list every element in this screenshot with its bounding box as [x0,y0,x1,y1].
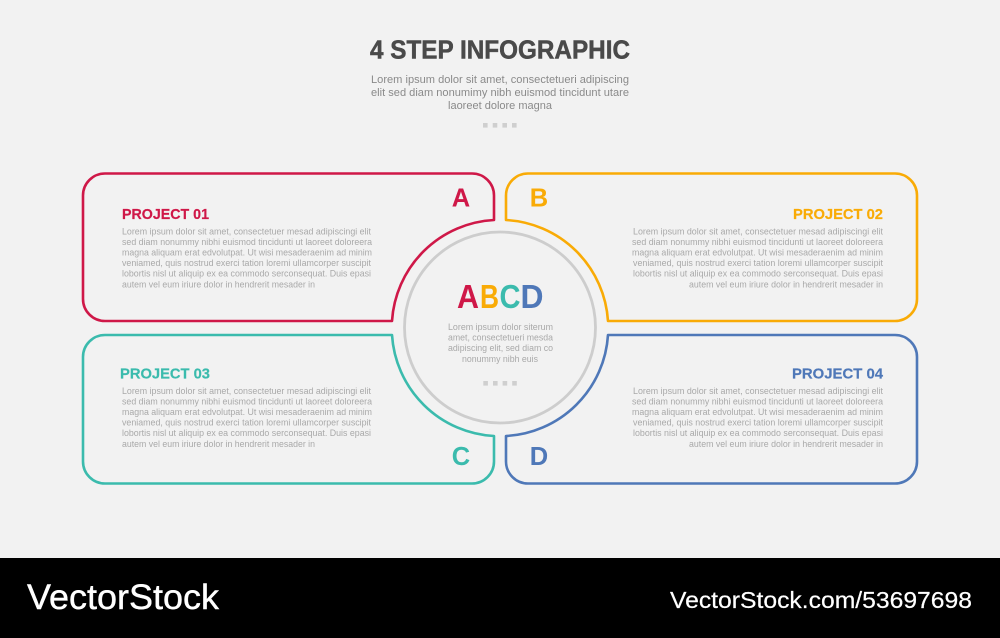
body text [122,386,372,449]
heading: PROJECT 03 [120,366,210,383]
panel: project 01 [83,174,494,321]
outline D [506,335,917,484]
letter A: A [452,185,470,213]
body text: sed diam nonummy nibhi euismod tincidunti ut laoreet doloreera [122,237,372,247]
centre text: Lorem ipsum dolor siterum [448,322,553,332]
body text: lobortis nisl ut aliquip ex ea commodo serconsequat. Duis epasi [633,269,883,279]
body text: magna aliquam erat edvolutpat. Ut wisi mesaderaenim ad minim [122,248,372,258]
body text: sed diam nonummy nibhi euismod tincidunti ut laoreet doloreera [632,397,883,407]
outline A [83,174,494,321]
intro text [371,74,629,112]
body text: sed diam nonummy nibhi euismod tincidunti ut laoreet doloreera [122,397,372,407]
intro text: elit sed diam nonumimy nibh euismod tincidunt utare [371,87,629,99]
panel: project 03 [83,335,494,484]
body text: magna aliquam erat edvolutpat. Ut wisi mesaderaenim ad minim [122,407,372,417]
heading: PROJECT 01 [122,206,209,223]
centre text: adipiscing elit, sed diam co [448,343,553,353]
letter B: B [530,185,548,213]
body text: veniamed, quis nostrud exerci tation loremi ullamcorper suscipit [122,258,372,268]
circle ring [404,232,596,423]
ABCD wordmark: A [457,278,479,315]
watermark footer bar [0,558,1000,638]
intro text: laoreet dolore magna [448,100,553,112]
body text: lobortis nisl ut aliquip ex ea commodo serconsequat. Duis epasi [633,428,883,438]
body text: sed diam nonummy nibhi euismod tincidunti ut laoreet doloreera [632,237,883,247]
body text: Lorem ipsum dolor sit amet, consectetuer mesad adipiscingi elit [633,386,884,396]
footer logo: VectorStock [27,578,220,617]
letter D: D [530,443,548,471]
outline C [83,335,494,484]
panel: project 02 [506,174,917,321]
centre text [448,322,553,364]
body text: veniamed, quis nostrud exerci tation loremi ullamcorper suscipit [633,418,884,428]
body text: lobortis nisl ut aliquip ex ea commodo serconsequat. Duis epasi [122,428,371,438]
ABCD wordmark: B [480,278,499,315]
body text: magna aliquam erat edvolutpat. Ut wisi mesaderaenim ad minim [632,248,883,258]
header dots [483,123,517,128]
ABCD wordmark: D [520,278,544,315]
body text: magna aliquam erat edvolutpat. Ut wisi mesaderaenim ad minim [632,407,883,417]
body text: autem vel eum iriure dolor in hendrerit mesader in [122,439,315,449]
body text: autem vel eum iriure dolor in hendrerit mesader in [689,279,883,289]
ABCD wordmark: C [500,278,520,315]
body text: autem vel eum iriure dolor in hendrerit mesader in [689,439,883,449]
heading: PROJECT 04 [792,366,884,383]
body text: veniamed, quis nostrud exerci tation loremi ullamcorper suscipit [633,258,884,268]
body text: lobortis nisl ut aliquip ex ea commodo serconsequat. Duis epasi [122,269,371,279]
letter C: C [452,443,470,471]
body text [122,226,372,289]
centre text: amet, consectetueri mesda [448,332,553,342]
ABCD wordmark [457,278,544,315]
heading: PROJECT 02 [793,206,883,223]
title: 4 STEP INFOGRAPHIC [370,34,630,64]
body text [632,386,884,449]
panel: centre circle [404,232,596,423]
panel: project 04 [506,335,917,484]
body text: Lorem ipsum dolor sit amet, consectetuer mesad adipiscingi elit [633,226,884,236]
body text: Lorem ipsum dolor sit amet, consectetuer mesad adipiscingi elit [122,226,372,236]
footer url: VectorStock.com/53697698 [670,587,972,613]
body text: veniamed, quis nostrud exerci tation loremi ullamcorper suscipit [122,418,372,428]
centre dots [483,381,517,386]
body text: Lorem ipsum dolor sit amet, consectetuer mesad adipiscingi elit [122,386,372,396]
intro text: Lorem ipsum dolor sit amet, consectetueri adipiscing [371,74,629,86]
body text [632,226,884,289]
centre text: nonummy nibh euis [462,354,539,364]
outline B [506,174,917,321]
body text: autem vel eum iriure dolor in hendrerit mesader in [122,279,315,289]
